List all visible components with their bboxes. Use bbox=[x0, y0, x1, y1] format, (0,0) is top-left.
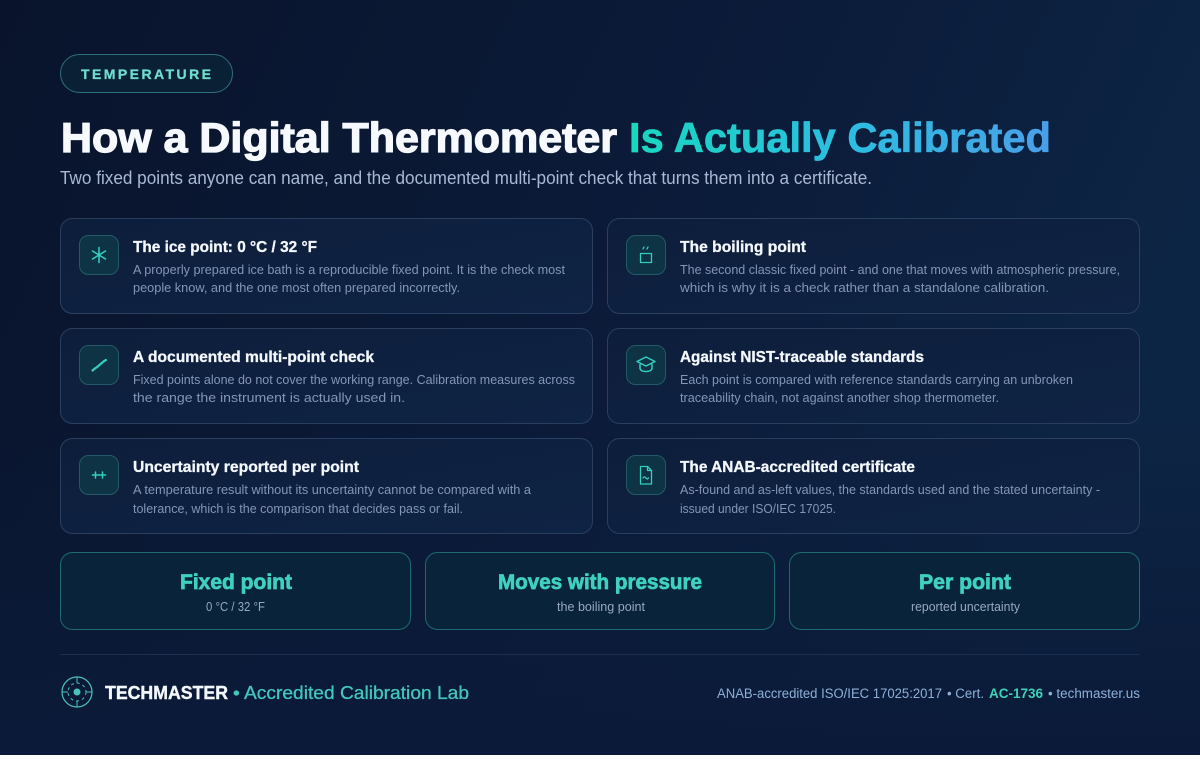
card text: uncertainty: tolerance, which is the comparison that decides pass or fail. bbox=[133, 501, 463, 516]
card text: multi-point check: Fixed points alone do not cover the working range. Calibration measures across bbox=[133, 372, 575, 387]
panel: boiling point bbox=[608, 218, 1140, 314]
panel: multi-point check bbox=[60, 328, 592, 424]
card text: boiling point bbox=[679, 262, 1120, 295]
subtitle: Two fixed points anyone can name, and the documented multi-point check that turns them into a certificate. bbox=[60, 168, 872, 188]
stat: moves with pressure: Moves with pressure bbox=[498, 571, 702, 594]
footer accreditation: • techmaster.us bbox=[1048, 686, 1140, 701]
tag pill: temperature: TEMPERATURE bbox=[81, 66, 211, 82]
card heading: boiling point: The boiling point bbox=[680, 239, 806, 256]
footer brand: • Accredited Calibration Lab bbox=[233, 683, 469, 703]
card text: ANAB certificate bbox=[680, 482, 1100, 516]
card heading: ice point: The ice point: 0 °C / 32 °F bbox=[133, 239, 317, 256]
card heading: uncertainty: Uncertainty reported per point bbox=[133, 459, 359, 476]
footer accreditation: AC-1736 bbox=[989, 686, 1043, 701]
stat: moves with pressure bbox=[426, 552, 774, 630]
icon: graduation cap bbox=[626, 346, 666, 384]
card text: NIST-traceable standards: traceability chain, not against another shop thermometer. bbox=[680, 390, 999, 405]
icon: snowflake bbox=[80, 236, 118, 274]
title bbox=[61, 114, 1051, 161]
icon: plus minus bbox=[80, 456, 118, 494]
card heading: NIST-traceable standards: Against NIST-traceable standards bbox=[680, 349, 924, 366]
title: Is Actually Calibrated bbox=[629, 114, 1051, 161]
footer accreditation: ANAB-accredited ISO/IEC 17025:2017 bbox=[717, 686, 942, 701]
card text: ANAB certificate: As-found and as-left values, the standards used and the stated uncertainty - bbox=[680, 482, 1100, 497]
card text: ice point bbox=[133, 262, 565, 295]
footer brand bbox=[105, 683, 469, 703]
footer brand: TECHMASTER bbox=[105, 683, 228, 703]
card text: ice point: A properly prepared ice bath is a reproducible fixed point. It is the check most bbox=[133, 262, 565, 277]
stat: moves with pressure: the boiling point bbox=[557, 600, 646, 614]
logo mark bbox=[62, 677, 92, 707]
panel: ice point bbox=[60, 218, 592, 314]
stat: fixed point bbox=[60, 552, 410, 630]
stat: per point: Per point bbox=[919, 571, 1011, 594]
stat: fixed point: 0 °C / 32 °F bbox=[206, 600, 265, 614]
card text: uncertainty: A temperature result without its uncertainty cannot be compared with a bbox=[133, 482, 532, 497]
footer accreditation: • Cert. bbox=[947, 686, 984, 701]
tag pill: temperature bbox=[60, 54, 232, 92]
card text: boiling point: The second classic fixed point - and one that moves with atmospheric pressure, bbox=[680, 262, 1120, 277]
icon: boiling pot bbox=[626, 236, 666, 274]
card text: ice point: people know, and the one most often prepared incorrectly. bbox=[133, 280, 460, 295]
icon: document bbox=[626, 456, 666, 494]
card text: NIST-traceable standards bbox=[680, 372, 1073, 405]
card text: NIST-traceable standards: Each point is compared with reference standards carrying an unbroken bbox=[680, 372, 1073, 387]
card text: uncertainty bbox=[133, 482, 532, 516]
panel: uncertainty bbox=[60, 438, 592, 534]
panel: NIST-traceable standards bbox=[608, 328, 1140, 424]
card text: ANAB certificate: issued under ISO/IEC 17025. bbox=[680, 501, 836, 516]
card heading: multi-point check: A documented multi-point check bbox=[133, 349, 374, 366]
footer accreditation bbox=[717, 686, 1140, 701]
title: How a Digital Thermometer bbox=[61, 114, 617, 161]
stat: per point bbox=[790, 552, 1140, 630]
card text: multi-point check bbox=[133, 372, 575, 405]
panel: ANAB certificate bbox=[608, 438, 1140, 534]
card text: boiling point: which is why it is a check rather than a standalone calibration. bbox=[679, 280, 1049, 295]
card text: multi-point check: the range the instrument is actually used in. bbox=[133, 390, 405, 405]
card heading: ANAB certificate: The ANAB-accredited certificate bbox=[680, 459, 915, 476]
stat: fixed point: Fixed point bbox=[180, 571, 292, 594]
stat: per point: reported uncertainty bbox=[911, 600, 1021, 614]
icon: rising line bbox=[80, 346, 118, 384]
